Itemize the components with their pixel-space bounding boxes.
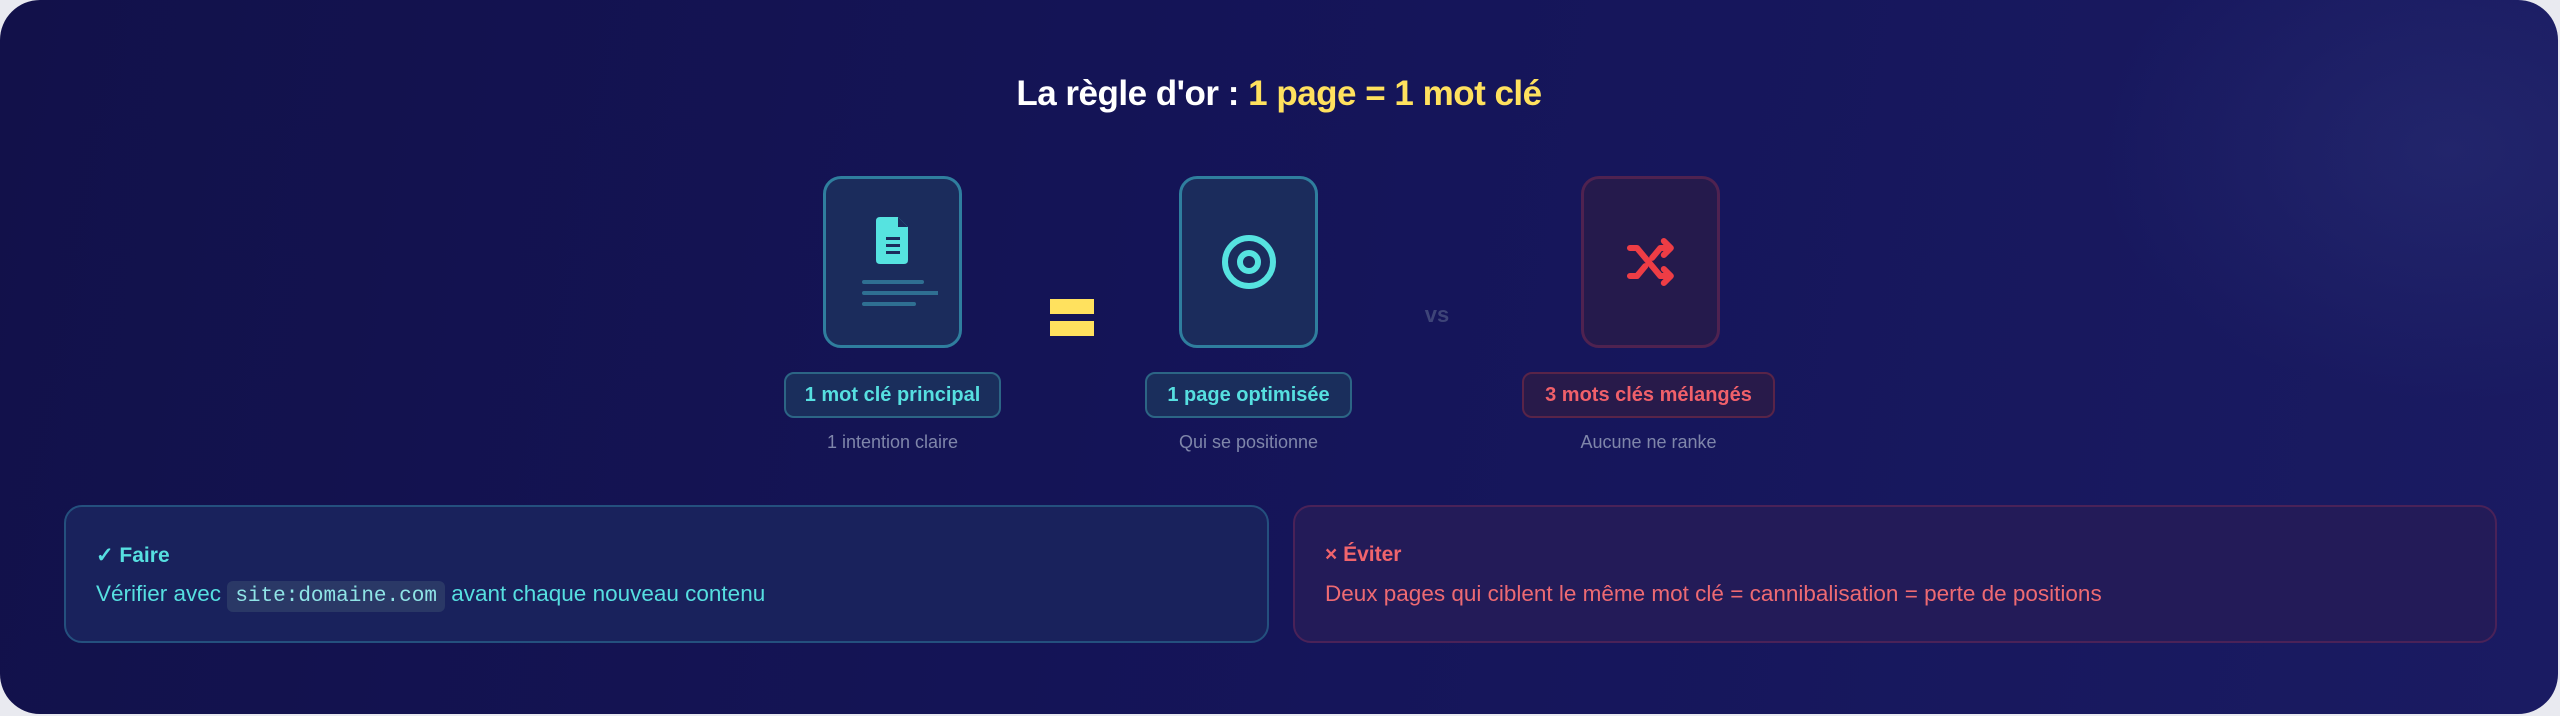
card: target icon xyxy=(1179,176,1318,348)
text: éviter body: Deux pages qui ciblent le même mot clé = cannibalisation = perte de positions xyxy=(1325,581,2102,606)
pill: 1 mot clé principal xyxy=(784,372,1001,418)
title: La règle d'or : 1 page = 1 mot clé xyxy=(1016,74,1542,113)
icon: target xyxy=(1224,238,1272,286)
panel: Faire xyxy=(64,505,1269,643)
icon: document xyxy=(862,217,940,306)
panel: Éviter xyxy=(1293,505,2497,643)
heading: Faire: ✓ Faire xyxy=(96,544,170,567)
caption: Aucune ne ranke: Aucune ne ranke xyxy=(1580,432,1717,452)
caption: Qui se positionne: Qui se positionne xyxy=(1179,432,1318,452)
pill: 1 mot clé principal: 1 mot clé principal xyxy=(805,384,980,406)
pill: 3 mots clés mélangés: 3 mots clés mélangés xyxy=(1545,384,1752,406)
pill: 1 page optimisée xyxy=(1145,372,1352,418)
pill: 3 mots clés mélangés xyxy=(1522,372,1775,418)
equals sign xyxy=(1050,299,1094,336)
text: faire body: Vérifier avec site:domaine.com avant chaque nouveau contenu xyxy=(96,581,765,608)
card: document icon xyxy=(823,176,962,348)
heading: Éviter: × Éviter xyxy=(1325,543,1401,566)
icon: shuffle xyxy=(1630,241,1670,283)
pill: 1 page optimisée: 1 page optimisée xyxy=(1167,384,1330,406)
vs label: vs xyxy=(1425,302,1449,327)
card: shuffle icon xyxy=(1581,176,1720,348)
caption: 1 intention claire: 1 intention claire xyxy=(827,432,958,452)
